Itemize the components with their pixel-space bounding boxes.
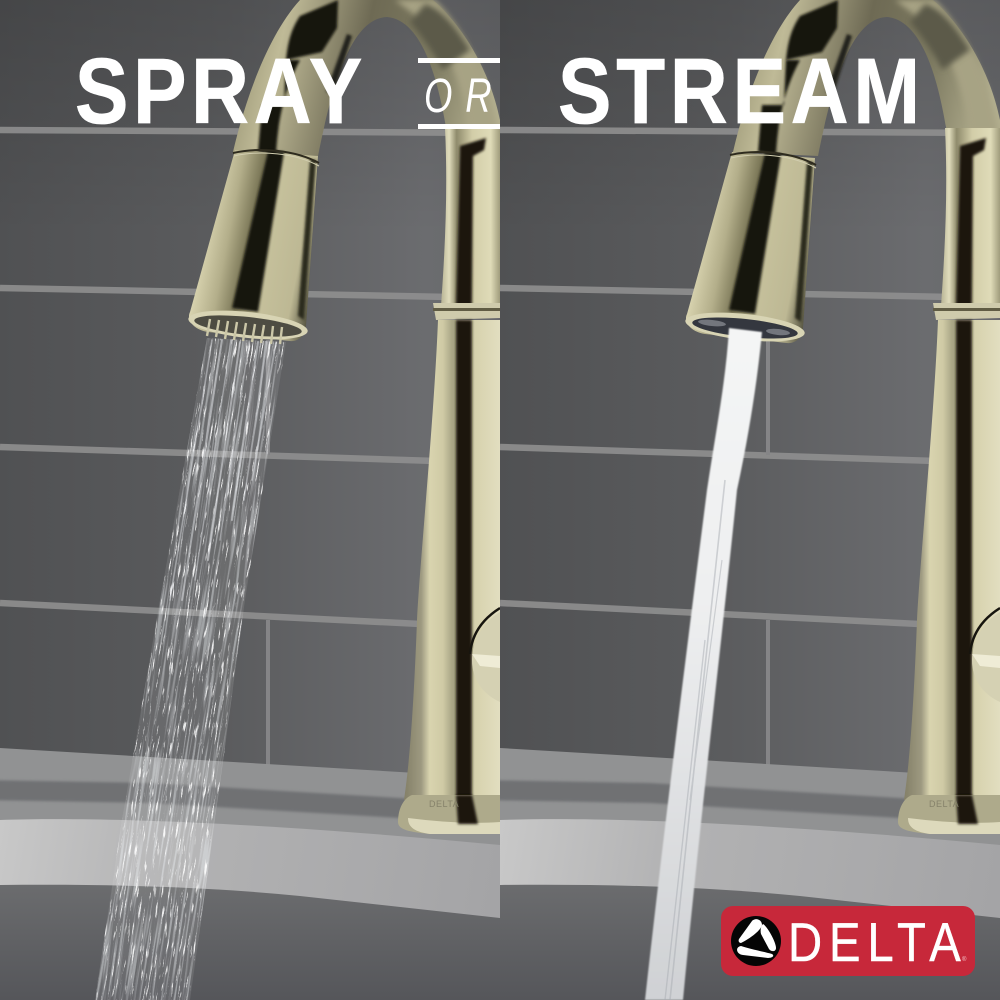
spray nozzles <box>194 315 302 344</box>
spray water <box>95 338 286 1000</box>
panel: stream (right) <box>480 0 1000 1000</box>
title word: stream: STREAM <box>558 39 920 143</box>
tile wall <box>0 0 500 790</box>
title word: spray: SPRAY <box>75 39 362 143</box>
panel: spray (left) <box>0 0 520 1000</box>
wordmark: DELTA: DELTA <box>788 912 962 973</box>
tile wall <box>500 0 1000 790</box>
title word: or <box>418 58 500 129</box>
stream head <box>684 152 816 346</box>
title word: or: OR <box>424 69 492 123</box>
icon: Delta triangle mark <box>731 916 781 966</box>
faucet neck and body <box>733 0 1000 834</box>
countertop and sink <box>0 748 500 982</box>
logo: Delta badge <box>721 906 975 976</box>
faucet neck and body <box>233 0 500 834</box>
stream aerator <box>692 318 798 338</box>
registered mark: ® <box>962 956 967 963</box>
title <box>75 39 920 143</box>
countertop and sink <box>500 748 1000 982</box>
stream water <box>645 328 762 1000</box>
spray head <box>187 150 319 344</box>
